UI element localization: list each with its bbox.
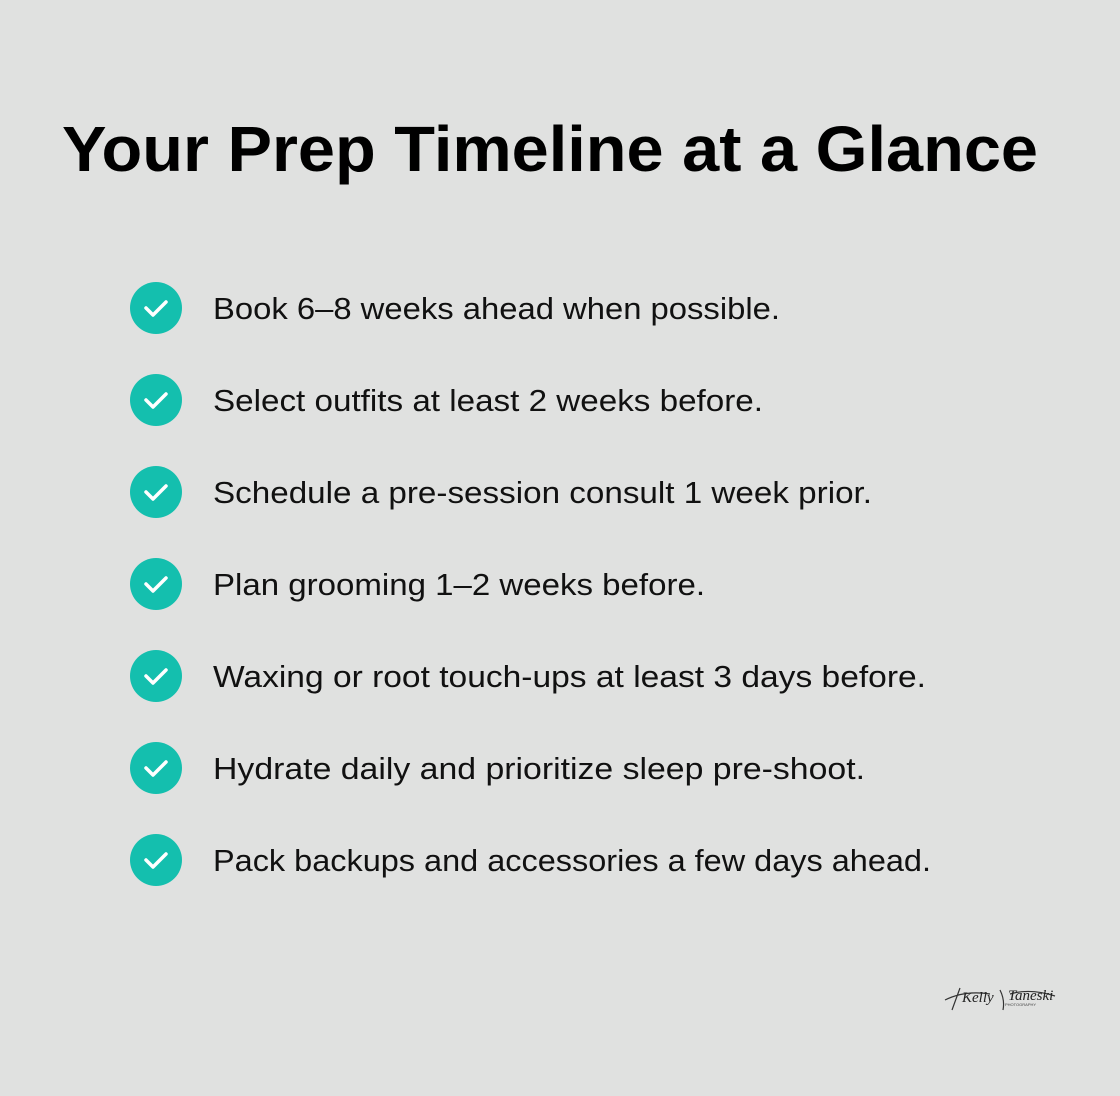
item 7	[130, 834, 931, 886]
item 4	[130, 558, 705, 610]
item 5: Waxing or root touch-ups at least 3 days before.	[213, 659, 926, 694]
item 3: Schedule a pre-session consult 1 week prior.	[213, 475, 872, 510]
logo signature: PHOTOGRAPHY	[1005, 1002, 1036, 1007]
item 1	[130, 282, 780, 334]
checklist	[130, 282, 931, 886]
logo signature	[945, 988, 1055, 1010]
logo signature: Taneski	[1008, 988, 1053, 1004]
item 6: Hydrate daily and prioritize sleep pre-shoot.	[213, 751, 865, 786]
item 2	[130, 374, 763, 426]
title: Your Prep Timeline at a Glance	[62, 113, 1038, 185]
item 3	[130, 466, 872, 518]
item 1: Book 6–8 weeks ahead when possible.	[213, 291, 780, 326]
item 5	[130, 650, 926, 702]
item 7: Pack backups and accessories a few days ahead.	[213, 843, 931, 878]
logo signature: Kelly	[961, 990, 994, 1006]
item 6	[130, 742, 865, 794]
item 4: Plan grooming 1–2 weeks before.	[213, 567, 705, 602]
item 2: Select outfits at least 2 weeks before.	[213, 383, 763, 418]
